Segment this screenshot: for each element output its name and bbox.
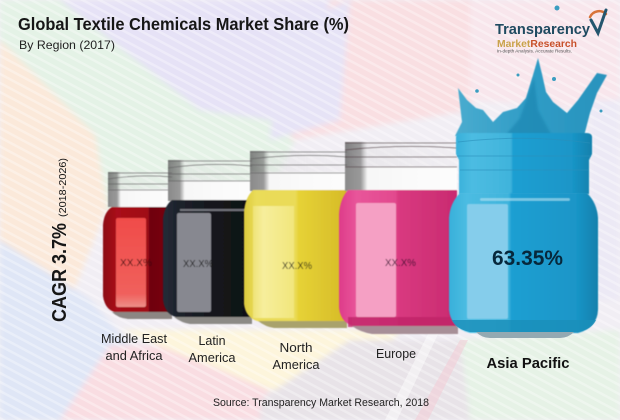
region label: Asia Pacific: Asia Pacific bbox=[486, 355, 570, 372]
region label: Latin America: Latin bbox=[198, 334, 226, 348]
logo: Transparency Market Research bbox=[495, 10, 606, 54]
CAGR label bbox=[49, 158, 71, 322]
jar: Latin America bbox=[163, 160, 252, 324]
region label: Latin America: America bbox=[188, 351, 236, 365]
jar highlight bbox=[177, 213, 211, 312]
jar body bbox=[244, 190, 347, 322]
label: share: XX.X% bbox=[282, 260, 312, 272]
droplets bbox=[475, 6, 602, 112]
logo icon: check mark bbox=[590, 10, 606, 33]
label: share: XX.X% bbox=[120, 257, 152, 269]
jar base bbox=[258, 321, 347, 328]
neck rings bbox=[457, 138, 591, 170]
jar base bbox=[352, 326, 458, 334]
source note: Source: Transparency Market Research, 2018 bbox=[213, 397, 429, 409]
jar highlight bbox=[116, 218, 146, 307]
jar bottom shade bbox=[348, 317, 457, 327]
jar highlight bbox=[356, 203, 396, 317]
jar neck bbox=[345, 142, 457, 191]
region label: North America: America bbox=[272, 358, 320, 372]
splash highlight bbox=[505, 78, 552, 136]
jar neck bbox=[108, 172, 172, 207]
jar: Europe bbox=[339, 142, 458, 334]
region label: North America: North bbox=[280, 341, 313, 355]
region label: Middle East and Africa: Middle East bbox=[101, 332, 168, 346]
CAGR label: (2018-2026) bbox=[57, 158, 69, 217]
jar highlight bbox=[467, 204, 508, 319]
logo wordmark: Transparency bbox=[495, 21, 591, 38]
jar shoulder line bbox=[180, 209, 252, 211]
jar highlight bbox=[253, 206, 294, 318]
jar base bbox=[476, 332, 574, 338]
region label: Middle East and Africa: and Africa bbox=[106, 349, 163, 363]
region label: Europe: Europe bbox=[376, 347, 416, 361]
region label: Middle East and Africa bbox=[101, 332, 168, 363]
jar neck bbox=[456, 133, 592, 194]
label: share: XX.X% bbox=[183, 258, 213, 270]
shoulder highlight bbox=[480, 198, 570, 201]
jar body bbox=[339, 190, 457, 327]
jar base bbox=[112, 312, 172, 319]
jar bottom shade bbox=[452, 320, 596, 332]
jar body bbox=[449, 193, 598, 333]
jar: Asia Pacific with splash bbox=[449, 6, 607, 338]
title: Global Textile Chemicals Market Share (%) bbox=[18, 14, 349, 34]
logo second line: MarketResearch bbox=[497, 38, 577, 50]
jar base bbox=[174, 317, 252, 324]
jar neck bbox=[250, 151, 347, 191]
label: share: 63.35% bbox=[492, 247, 563, 270]
jar body bbox=[163, 200, 252, 318]
jar neck bbox=[168, 160, 252, 201]
region label: North America bbox=[272, 341, 320, 372]
region label: Latin America bbox=[188, 334, 236, 365]
paint splash bbox=[455, 58, 607, 136]
logo tagline: In-depth Analysis. Accurate Results. bbox=[497, 48, 572, 54]
jar body bbox=[103, 207, 172, 313]
jar: Middle East and Africa bbox=[103, 172, 172, 319]
subtitle: By Region (2017) bbox=[19, 38, 115, 52]
label: share: XX.X% bbox=[385, 257, 416, 269]
CAGR label: CAGR 3.7% bbox=[49, 223, 71, 322]
jar: North America bbox=[244, 151, 347, 328]
